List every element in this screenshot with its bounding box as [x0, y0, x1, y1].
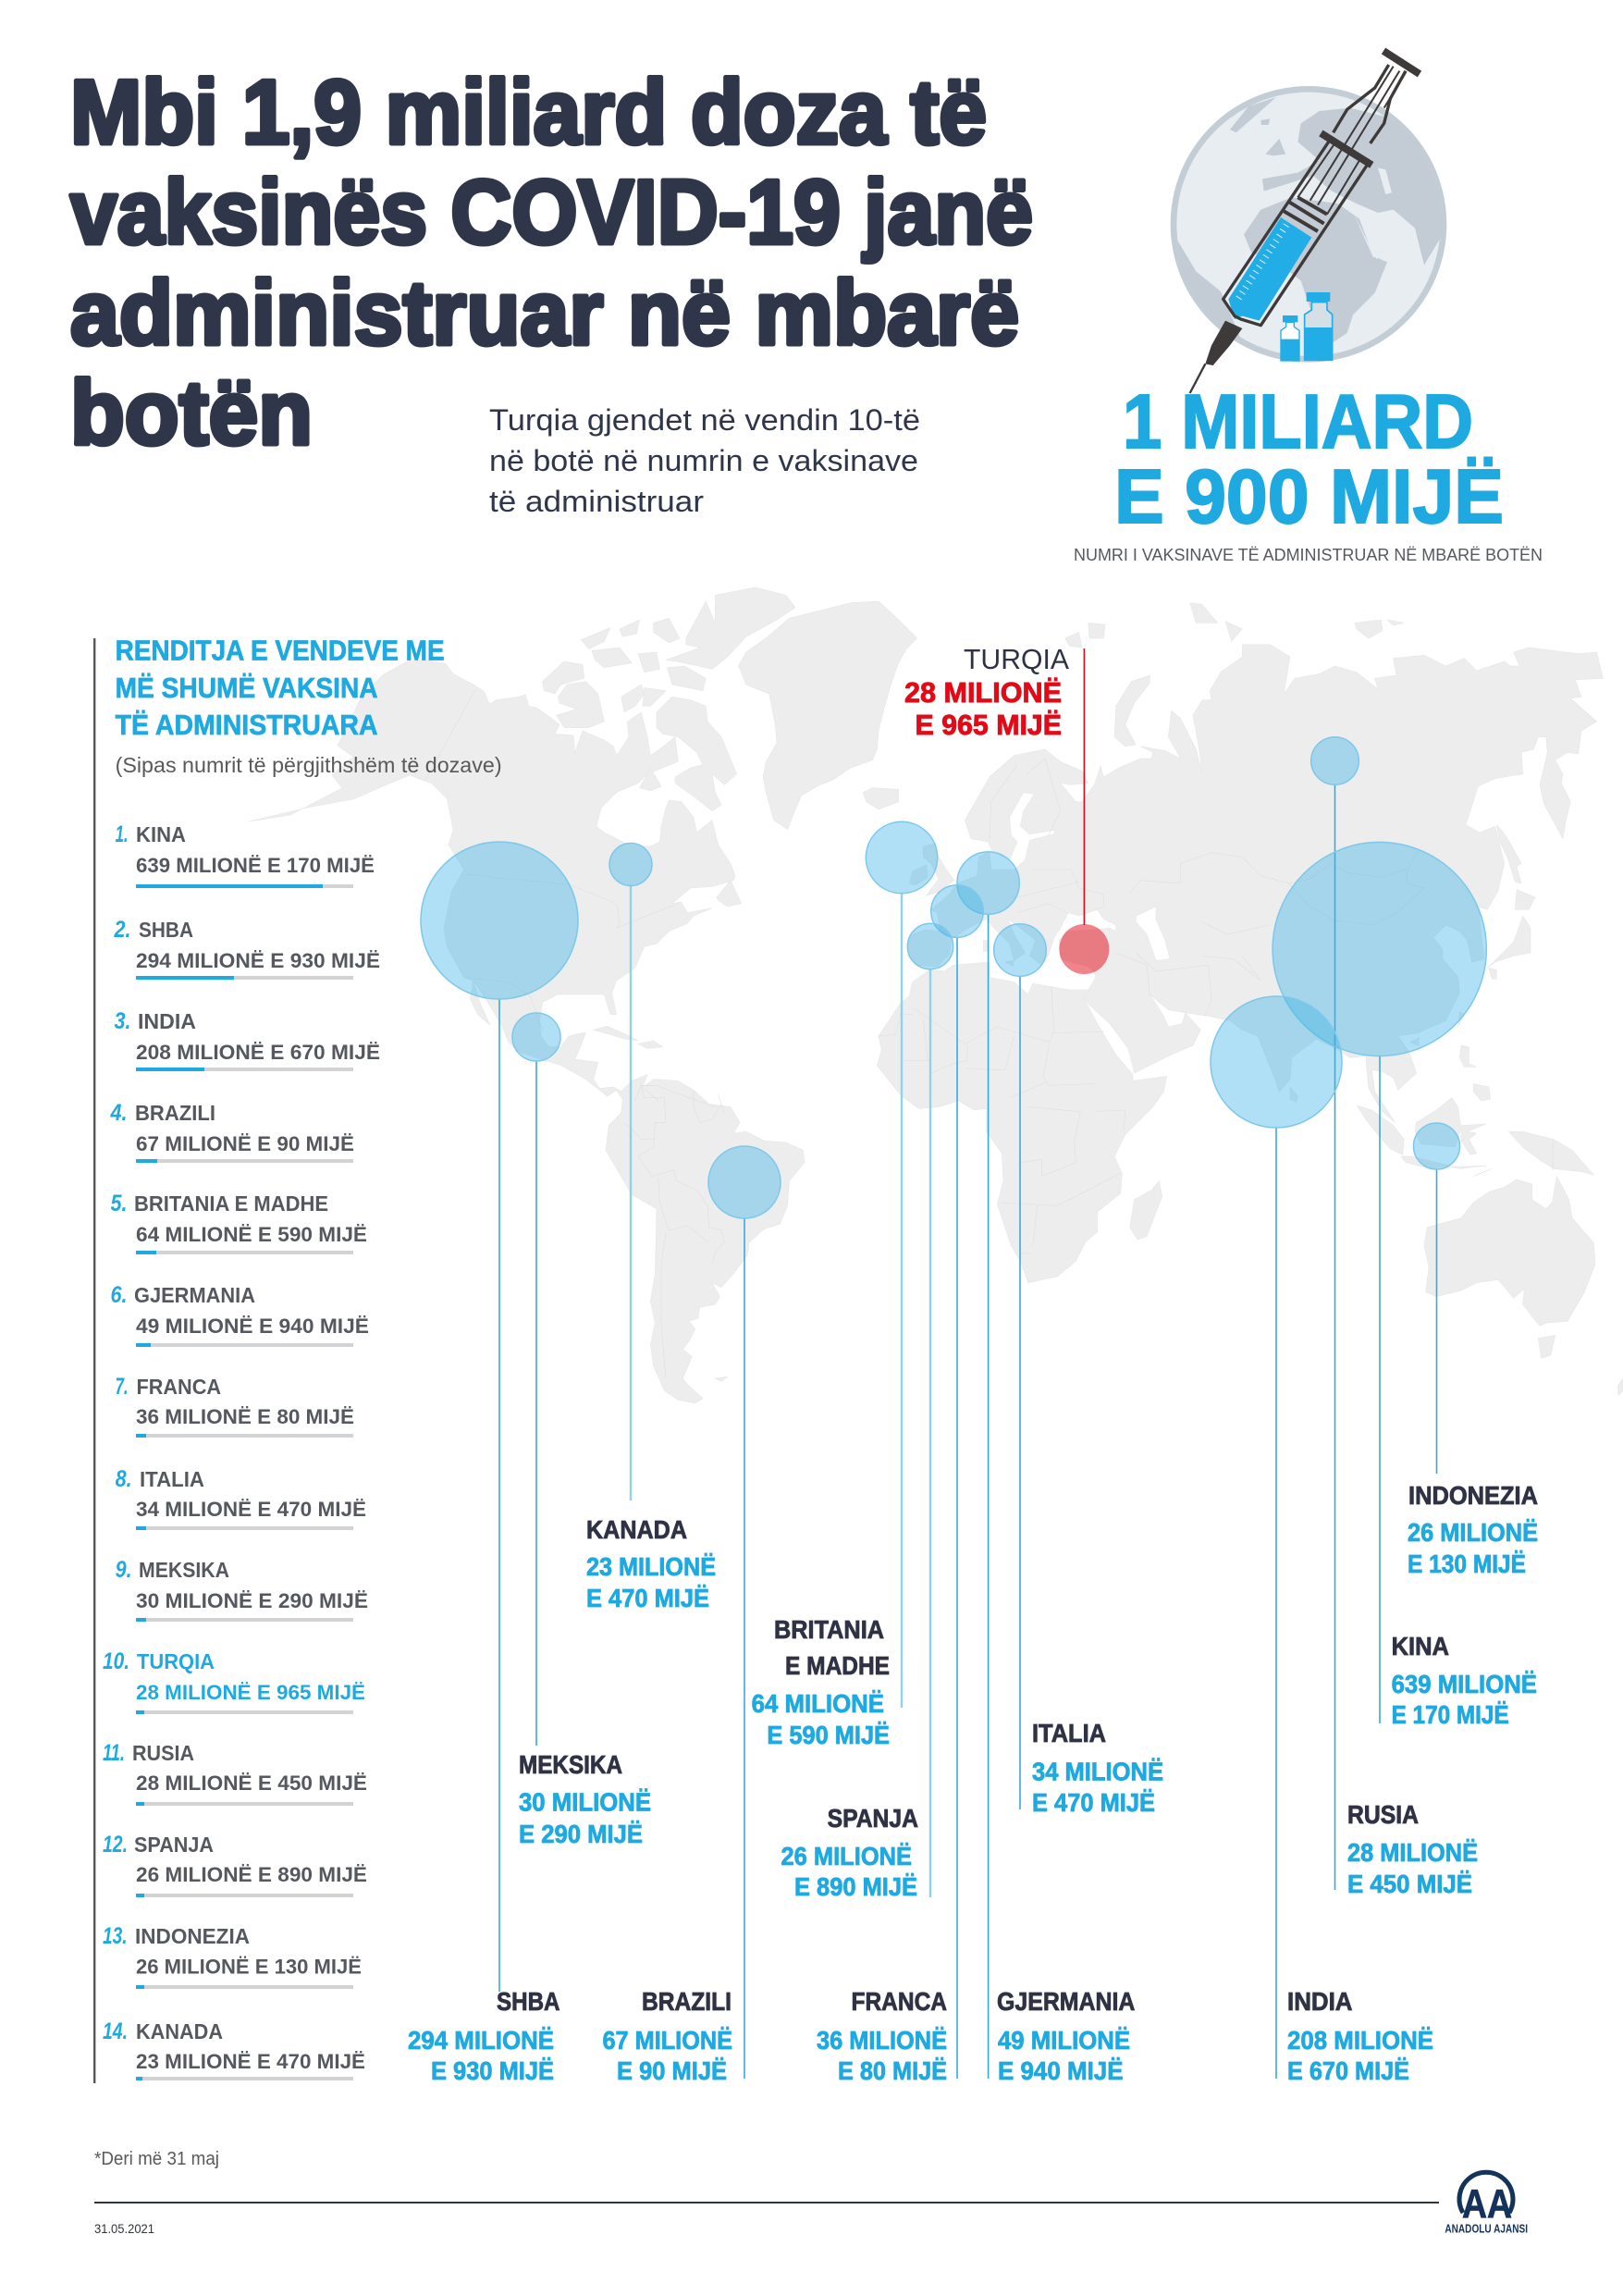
callout: India [1287, 1987, 1433, 2085]
callout: Brazili: E 90 MIJË [617, 2056, 727, 2085]
rank 9 [116, 1557, 368, 1622]
rank 14: 14. [103, 2018, 128, 2044]
rank 8 [116, 1466, 366, 1530]
rank 6: GJERMANIA [134, 1283, 255, 1307]
headline figure: E 900 MIJË [1114, 453, 1504, 539]
ranking heading: MË SHUMË VAKSINA [116, 672, 378, 704]
rank 5: 5. [111, 1191, 128, 1216]
icon: vials [1281, 292, 1333, 361]
rank 7: 36 MILIONË E 80 MIJË [136, 1405, 354, 1428]
logo: Anadolu Ajansi: AA [1462, 2181, 1512, 2227]
rank 5: 64 MILIONË E 590 MIJË [136, 1223, 367, 1246]
callout: Britania e Madhe: BRITANIA [774, 1615, 884, 1644]
callout: Indonezia: E 130 MIJË [1408, 1549, 1526, 1578]
callout: Turqia: E 965 MIJË [916, 709, 1062, 741]
callout: Kina: E 170 MIJË [1392, 1700, 1509, 1729]
rank 11: 11. [103, 1740, 125, 1766]
callout: Turqia: 28 MILIONË [904, 676, 1062, 709]
rank 4 [110, 1100, 354, 1163]
callout: Franca [817, 1987, 947, 2085]
rank 11: RUSIA [132, 1741, 194, 1765]
rank 2: 294 MILIONË E 930 MIJË [136, 949, 380, 972]
title [70, 61, 1033, 463]
rank 3: 3. [115, 1008, 131, 1034]
callout: Indonezia: 26 MILIONË [1408, 1518, 1538, 1547]
subtitle [489, 403, 920, 518]
callout: Kanada [586, 1515, 716, 1612]
rank 8: ITALIA [140, 1467, 204, 1491]
rank 2: SHBA [139, 918, 193, 942]
headline figure: 1 MILIARD [1123, 378, 1473, 464]
callout: Spanja: 26 MILIONË [781, 1842, 912, 1870]
title: vaksinës COVID-19 janë [70, 161, 1033, 263]
headline figure: NUMRI I VAKSINAVE TË ADMINISTRUAR NË MBARË BOTËN [1074, 546, 1543, 564]
rank 9: MEKSIKA [139, 1558, 229, 1582]
ranking heading: TË ADMINISTRUARA [116, 709, 378, 741]
rank 5: BRITANIA E MADHE [134, 1191, 328, 1216]
callout: Meksika: 30 MILIONË [519, 1787, 651, 1817]
logo: Anadolu Ajansi [1445, 2172, 1528, 2235]
callout: SHBA [408, 1987, 560, 2085]
ranking heading: RENDITJA E VENDEVE ME [116, 635, 445, 666]
syringe body [1190, 51, 1420, 393]
subtitle: në botë në numrin e vaksinave [489, 444, 918, 477]
callout: Italia: ITALIA [1032, 1719, 1106, 1747]
rank 12: 12. [103, 1832, 128, 1858]
logo: Anadolu Ajansi: ANADOLU AJANSI [1445, 2222, 1528, 2235]
callout: Meksika: E 290 MIJË [519, 1820, 643, 1848]
rank 9: 30 MILIONË E 290 MIJË [136, 1589, 368, 1612]
callout: Spanja: E 890 MIJË [794, 1872, 917, 1901]
callout: Indonezia: INDONEZIA [1408, 1481, 1538, 1510]
rank 7: FRANCA [137, 1375, 221, 1399]
rank 12: SPANJA [134, 1833, 214, 1857]
rank 13 [103, 1923, 362, 1989]
title: botën [70, 362, 313, 463]
rank 4: BRAZILI [135, 1101, 215, 1125]
callout: Brazili: BRAZILI [642, 1987, 732, 2016]
callout: Gjermania [997, 1987, 1135, 2085]
ranking heading [116, 635, 502, 777]
rank 4: 4. [110, 1100, 128, 1126]
callout: Britania e Madhe [752, 1615, 890, 1749]
ranking heading: (Sipas numrit të përgjithshëm të dozave) [116, 753, 502, 777]
rank 10 highlighted: 10. [103, 1648, 129, 1674]
rank 1 [116, 821, 375, 888]
footnote: *Deri më 31 maj [94, 2149, 219, 2169]
world map background [249, 587, 1623, 1403]
callout: Spanja: SPANJA [828, 1804, 918, 1833]
callout: Turqia [904, 643, 1069, 741]
subtitle: të administruar [489, 485, 704, 518]
callout: Rusia [1347, 1800, 1478, 1898]
proportional bubbles [421, 737, 1486, 1218]
panel: ranking list [93, 635, 502, 2083]
rank 3: INDIA [138, 1009, 196, 1033]
rank 5 [111, 1191, 367, 1254]
callout: Kanada: KANADA [586, 1515, 687, 1544]
callout: Brazili [603, 1987, 732, 2085]
rank 3: 208 MILIONË E 670 MIJË [136, 1041, 380, 1064]
callout: Britania e Madhe: E MADHE [785, 1651, 890, 1680]
rank 10 highlighted: TURQIA [137, 1649, 215, 1673]
callout: Rusia: 28 MILIONË [1347, 1838, 1478, 1867]
callout: Meksika [519, 1750, 651, 1848]
icon: globe with syringe and vials [1171, 51, 1446, 393]
rank 9: 9. [116, 1557, 132, 1583]
callout: Indonezia [1408, 1481, 1538, 1578]
callout: Rusia: RUSIA [1347, 1800, 1419, 1829]
callout: Gjermania: GJERMANIA [997, 1987, 1135, 2016]
callout: Kina: 639 MILIONË [1392, 1670, 1537, 1698]
rank 10 highlighted [103, 1648, 365, 1714]
subtitle: Turqia gjendet në vendin 10-të [489, 403, 920, 437]
rank 7 [116, 1374, 354, 1438]
callout: SHBA: SHBA [497, 1987, 560, 2016]
rank 1: 639 MILIONË E 170 MIJË [136, 854, 375, 877]
rank 6: 49 MILIONË E 940 MIJË [136, 1315, 369, 1338]
leader lines [499, 648, 1437, 2079]
rank 2: 2. [114, 917, 131, 943]
rank 6: 6. [111, 1282, 128, 1308]
callout: Meksika: MEKSIKA [519, 1750, 622, 1779]
rank 13: INDONEZIA [135, 1924, 250, 1948]
callout: Britania e Madhe: 64 MILIONË [752, 1689, 884, 1718]
rank 14: 23 MILIONË E 470 MIJË [136, 2050, 365, 2073]
callout: Italia: 34 MILIONË [1032, 1758, 1163, 1785]
rank 12 [103, 1832, 367, 1897]
callout: Gjermania: E 940 MIJË [998, 2056, 1123, 2085]
title: administruar në mbarë [70, 262, 1019, 364]
rank 8: 8. [116, 1466, 132, 1492]
callout: Gjermania: 49 MILIONË [998, 2026, 1130, 2055]
callout: India: INDIA [1287, 1987, 1352, 2016]
rank 7: 7. [116, 1374, 129, 1400]
rank 8: 34 MILIONË E 470 MIJË [136, 1498, 366, 1521]
rank 3 [115, 1008, 380, 1071]
callout: Franca: FRANCA [851, 1987, 947, 2016]
callout: Brazili: 67 MILIONË [603, 2026, 732, 2055]
rank 1: 1. [116, 821, 129, 847]
rank 13: 13. [103, 1923, 128, 1949]
callout: Britania e Madhe: E 590 MIJË [767, 1721, 890, 1749]
rank 13: 26 MILIONË E 130 MIJË [136, 1956, 362, 1979]
callout: Italia: E 470 MIJË [1032, 1788, 1155, 1817]
title: Mbi 1,9 miliard doza të [70, 61, 987, 163]
rank 14 [103, 2018, 365, 2080]
rank 10 highlighted: 28 MILIONË E 965 MIJË [136, 1681, 365, 1704]
callout: Franca: E 80 MIJË [838, 2056, 947, 2085]
callout: Rusia: E 450 MIJË [1347, 1870, 1472, 1898]
callout: India: 208 MILIONË [1287, 2026, 1433, 2055]
rank 2 [114, 917, 380, 980]
callout: Kanada: 23 MILIONË [586, 1552, 716, 1581]
callout: India: E 670 MIJË [1287, 2056, 1409, 2085]
callout: Franca: 36 MILIONË [817, 2026, 947, 2055]
callout: Italia [1032, 1719, 1163, 1817]
date: 31.05.2021 [94, 2221, 154, 2236]
headline figure [1074, 378, 1543, 564]
callout: Turqia: TURQIA [964, 643, 1069, 675]
rank 4: 67 MILIONË E 90 MIJË [136, 1132, 354, 1155]
rank 11 [103, 1740, 367, 1806]
callout: Kina: KINA [1392, 1632, 1449, 1660]
callout: Spanja [781, 1804, 918, 1901]
callout: Kina [1392, 1632, 1537, 1729]
callout: SHBA: E 930 MIJË [431, 2056, 554, 2085]
callout: SHBA: 294 MILIONË [408, 2026, 554, 2055]
rank 11: 28 MILIONË E 450 MIJË [136, 1771, 367, 1795]
rank 14: KANADA [136, 2019, 223, 2043]
callout: Kanada: E 470 MIJË [586, 1584, 709, 1612]
rank 12: 26 MILIONË E 890 MIJË [136, 1863, 367, 1886]
rank 6 [111, 1282, 369, 1347]
rank 1: KINA [136, 822, 186, 846]
